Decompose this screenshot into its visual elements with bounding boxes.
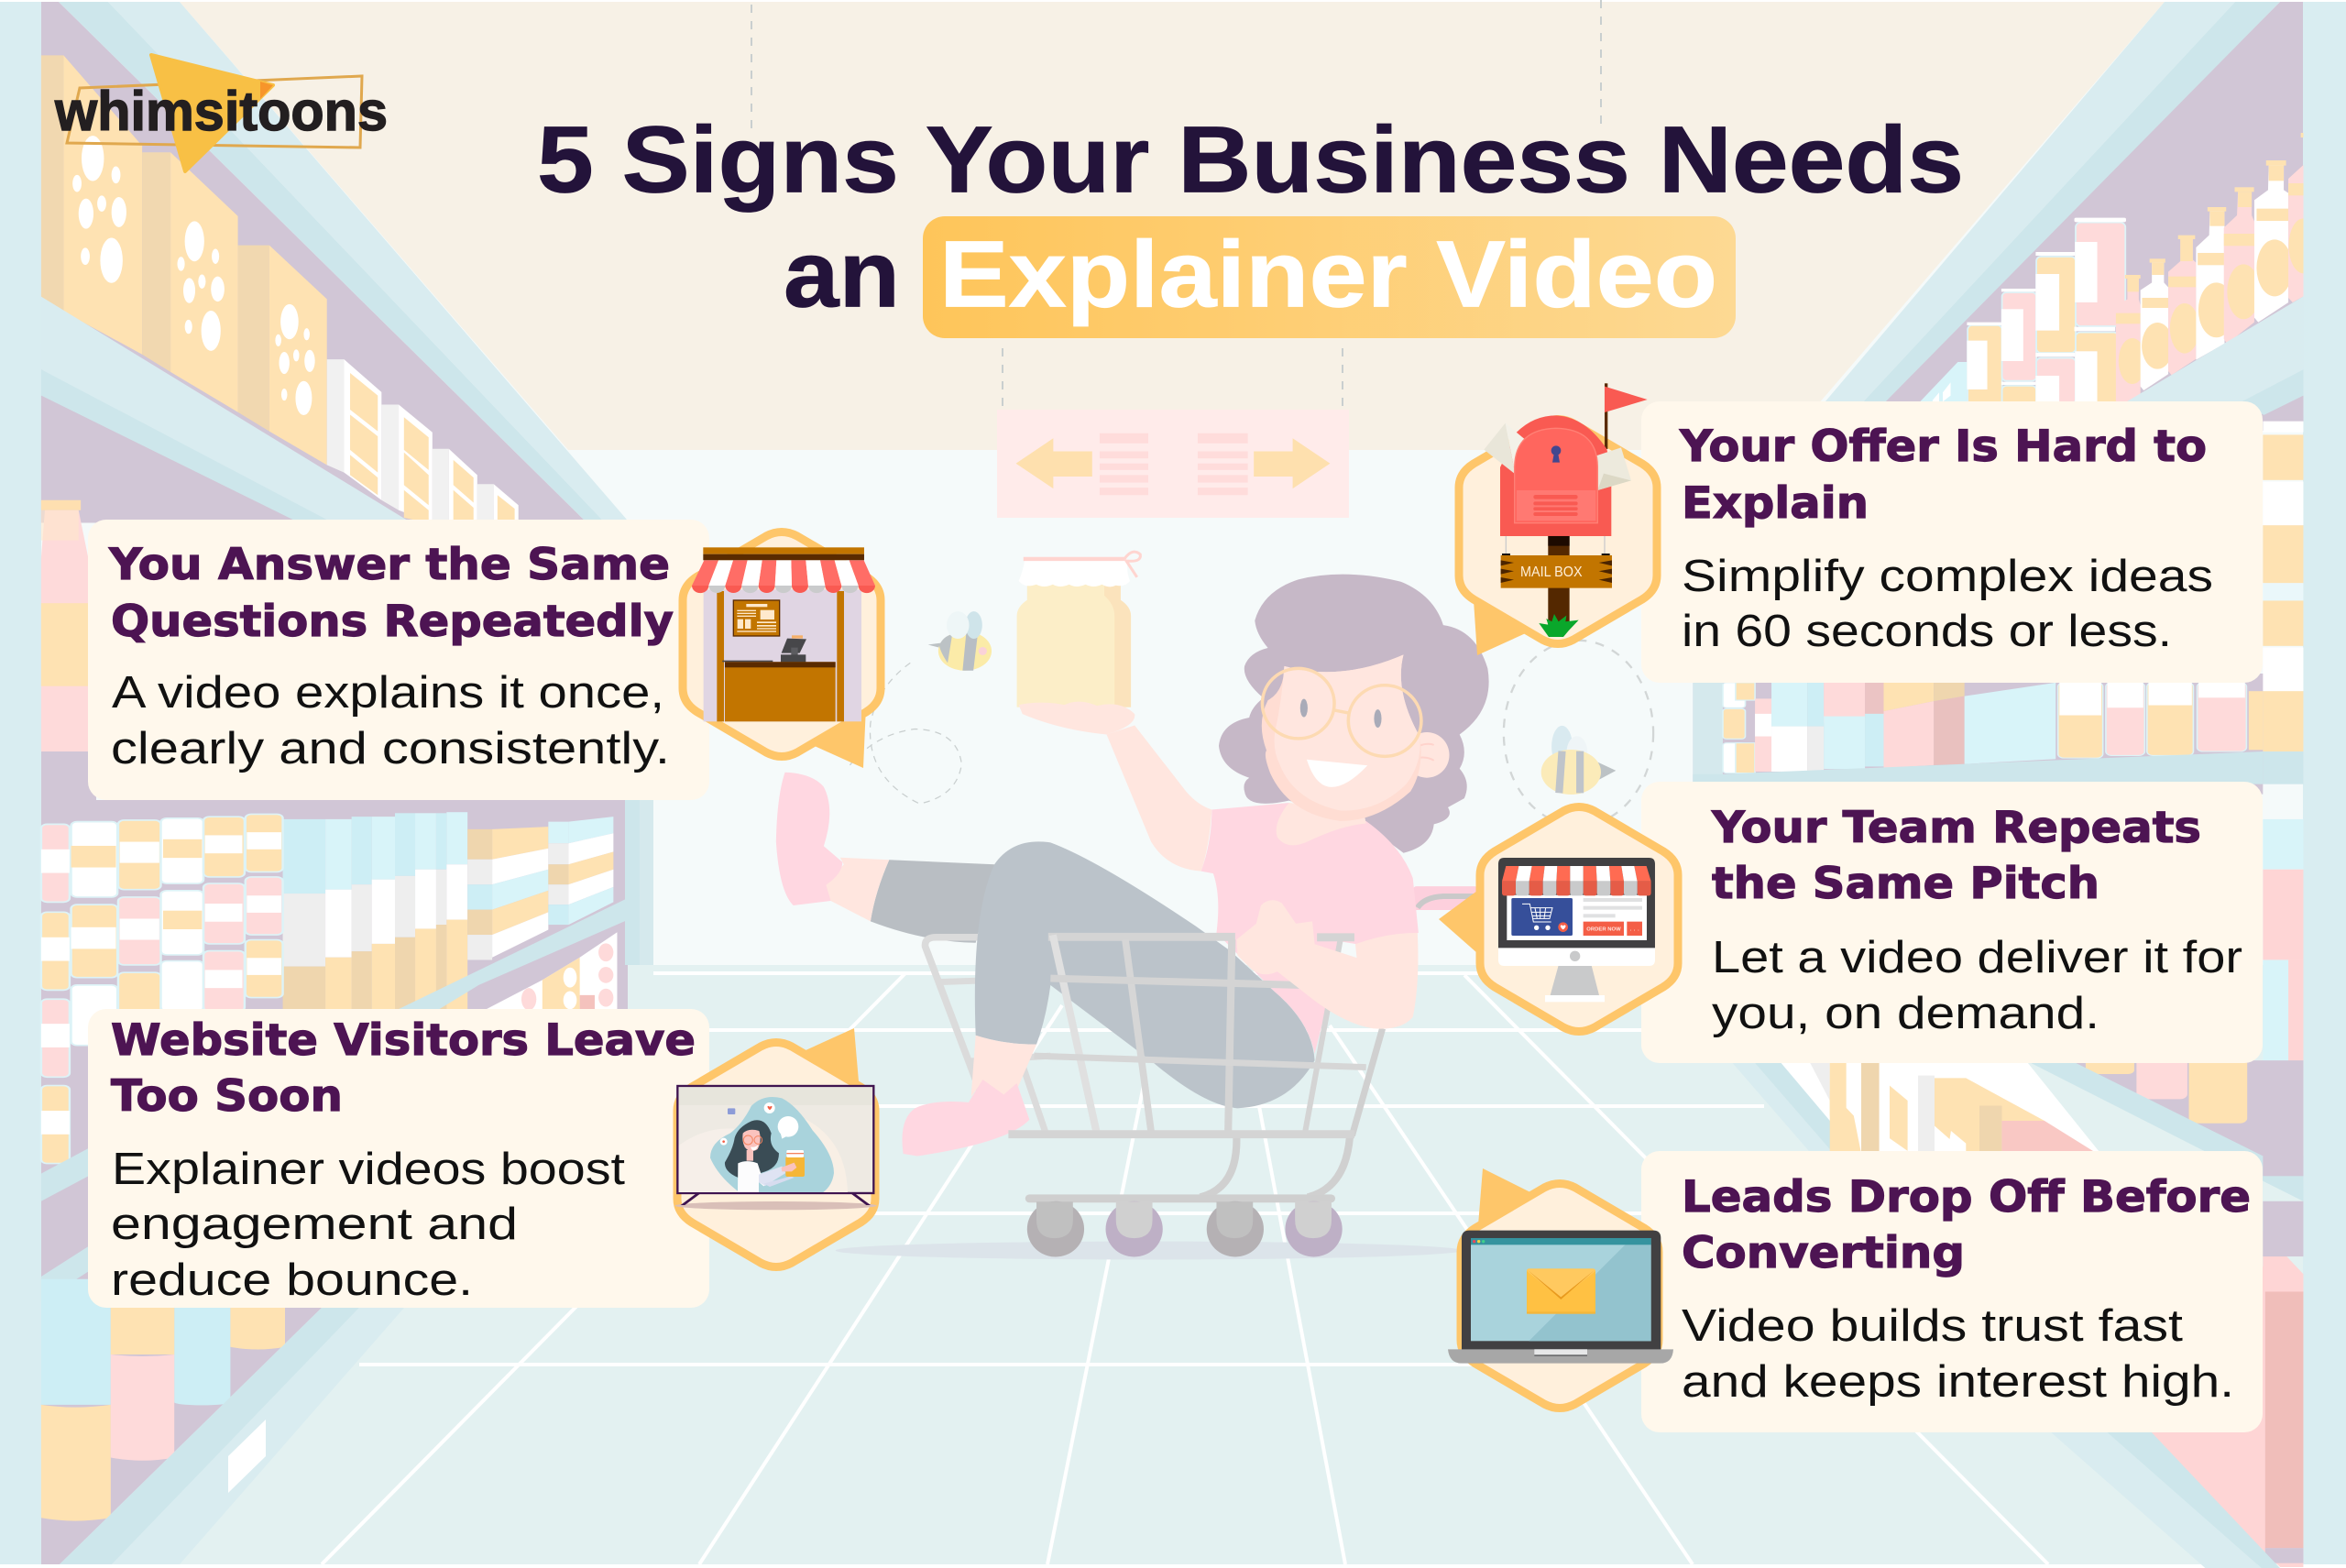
- card: You Answer the Same Questions Repeatedly: Questions Repeatedly: [111, 597, 674, 647]
- icon: online shop monitor in hexagon: [1439, 806, 1678, 1032]
- card: Leads Drop Off Before Converting: [1641, 1151, 2263, 1432]
- neck and face: [1262, 654, 1450, 845]
- hair: [1219, 575, 1489, 853]
- shadow under cart: [836, 1242, 1462, 1259]
- card: Your Team Repeats the Same Pitch: Your Team Repeats: [1711, 803, 2201, 853]
- card: You Answer the Same Questions Repeatedly: A video explains it once,: [112, 668, 664, 718]
- honey jar: [1017, 552, 1140, 707]
- wheels: [1027, 1201, 1343, 1256]
- thumbs-up arm: [1236, 900, 1418, 1029]
- handle of cart: [1413, 886, 1478, 910]
- title: [537, 106, 1964, 338]
- card: Leads Drop Off Before Converting: Converting: [1682, 1228, 1965, 1278]
- card: Website Visitors Leave Too Soon: [88, 1009, 709, 1308]
- main leg: [902, 841, 1315, 1157]
- icon: online shop monitor in hexagon: ...: [1630, 927, 1639, 932]
- logo: whimsitoons: [54, 55, 388, 171]
- card: Your Offer Is Hard to Explain: Your Offer Is Hard to: [1679, 422, 2207, 472]
- card: Leads Drop Off Before Converting: and keeps interest high.: [1682, 1357, 2234, 1407]
- card: Your Offer Is Hard to Explain: Simplify complex ideas: [1682, 552, 2213, 601]
- card: Your Team Repeats the Same Pitch: you, on demand.: [1712, 989, 2099, 1038]
- card: Website Visitors Leave Too Soon: reduce bounce.: [111, 1255, 473, 1305]
- flying bee left with dashed path: [847, 611, 992, 804]
- card: You Answer the Same Questions Repeatedly: [88, 520, 709, 800]
- card: Leads Drop Off Before Converting: Video builds trust fast: [1682, 1301, 2183, 1351]
- card: Leads Drop Off Before Converting: Leads Drop Off Before: [1682, 1172, 2251, 1223]
- cart front frame: [1008, 935, 1383, 1199]
- logo: whimsitoons: whimsitoons: [54, 81, 388, 142]
- icon: mail box in hexagon: MAIL BOX: [1520, 565, 1583, 580]
- left lower shelf: [41, 800, 653, 1564]
- card: Your Offer Is Hard to Explain: [1641, 401, 2263, 683]
- title: 5 Signs Your Business Needs: [537, 106, 1964, 213]
- right lower shelf: [1730, 819, 2303, 1568]
- shopper woman in cart: [776, 552, 1489, 1259]
- title: Explainer Video: [939, 222, 1717, 326]
- shirt: [1201, 803, 1419, 1054]
- title: an: [784, 222, 900, 326]
- card: Your Team Repeats the Same Pitch: Let a video deliver it for: [1712, 933, 2242, 982]
- card: Your Offer Is Hard to Explain: in 60 seconds or less.: [1682, 607, 2172, 656]
- icon: laptop with email in hexagon: [1448, 1168, 1673, 1408]
- raised leg: [776, 773, 994, 943]
- card: Website Visitors Leave Too Soon: Website Visitors Leave: [111, 1015, 696, 1066]
- icon: TV with woman holding jar in hexagon: [675, 1028, 877, 1266]
- flying bee right with dashed path: [1504, 641, 1653, 826]
- card: Your Offer Is Hard to Explain: Explain: [1682, 478, 1869, 529]
- card: Your Team Repeats the Same Pitch: the Same Pitch: [1712, 859, 2099, 909]
- raised arm and hand: [1019, 702, 1211, 872]
- card: Website Visitors Leave Too Soon: engagement and: [111, 1200, 518, 1249]
- card: You Answer the Same Questions Repeatedly: clearly and consistently.: [111, 724, 670, 773]
- icon: mail box in hexagon: [1459, 383, 1657, 655]
- cart rear frame: [926, 938, 1050, 1134]
- card: Website Visitors Leave Too Soon: Explainer videos boost: [112, 1145, 625, 1194]
- icon: online shop monitor in hexagon: ORDER NOW: [1586, 927, 1622, 932]
- card: Your Team Repeats the Same Pitch: [1641, 782, 2263, 1063]
- card: Website Visitors Leave Too Soon: Too Soon: [111, 1071, 343, 1122]
- left upper shelf: [41, 2, 627, 806]
- right upper shelf with jars and bottles: [1820, 2, 2304, 784]
- right middle shelf: [1693, 674, 2263, 795]
- icon: market stall in hexagon: [683, 532, 881, 768]
- card: You Answer the Same Questions Repeatedly: You Answer the Same: [108, 540, 670, 590]
